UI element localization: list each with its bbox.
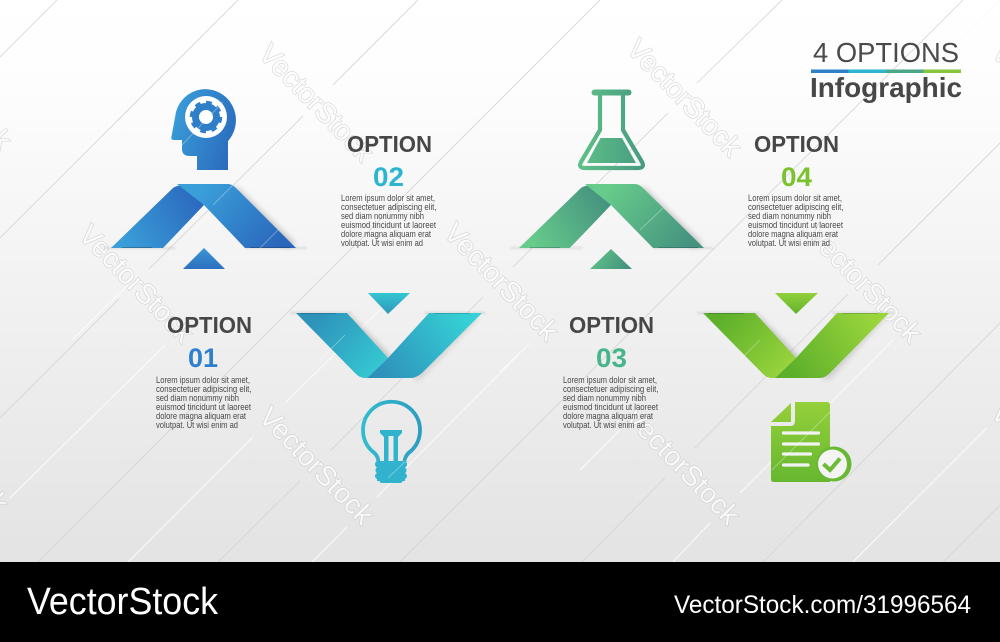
watermarks: VectorStock xyxy=(801,219,928,349)
text block: option 04: euismod tincidunt ut laoreet xyxy=(748,220,843,230)
text block: option 02: Lorem ipsum dolor sit amet, xyxy=(341,193,435,203)
text block: option 03: dolore magna aliquam erat xyxy=(563,411,653,421)
watermarks xyxy=(0,26,1000,531)
icon: flask xyxy=(580,92,643,168)
text block: option 04 xyxy=(748,193,844,248)
text block: option 04: Lorem ipsum dolor sit amet, xyxy=(748,193,842,203)
text block: option 02: dolore magna aliquam erat xyxy=(341,229,431,239)
number: 04: 04 xyxy=(781,162,812,192)
number: 02: 02 xyxy=(373,162,404,192)
panel: option 04 xyxy=(510,92,844,269)
watermarks: VectorStock xyxy=(438,217,565,347)
number: 01: 01 xyxy=(188,343,218,373)
text block: option 01: consectetuer adipiscing elit, xyxy=(156,384,252,394)
heading: option 02: OPTION xyxy=(347,131,432,157)
watermarks: VectorStock xyxy=(253,401,380,531)
watermarks: VectorStock xyxy=(253,38,380,168)
text block: option 02: euismod tincidunt ut laoreet xyxy=(341,220,436,230)
title: 4 OPTIONS xyxy=(813,37,959,68)
text block: option 03: volutpat. Ut wisi enim ad xyxy=(563,420,645,430)
title xyxy=(810,37,962,103)
triangle marker xyxy=(183,248,225,269)
text block: option 03: euismod tincidunt ut laoreet xyxy=(563,402,658,412)
footer bar xyxy=(0,562,1000,642)
text block: option 03: consectetuer adipiscing elit, xyxy=(563,384,658,394)
panel: option 03 xyxy=(563,293,894,482)
triangle marker xyxy=(775,293,818,314)
ribbon: blue up chevron xyxy=(104,184,307,249)
text block: option 01: euismod tincidunt ut laoreet xyxy=(156,402,251,412)
watermarks: VectorStock xyxy=(73,219,200,349)
ribbon: teal down chevron xyxy=(290,312,486,380)
number: 03: 03 xyxy=(596,343,627,373)
watermarks: VectorStock xyxy=(619,401,746,531)
ribbon: green down chevron xyxy=(697,312,894,380)
heading: option 03: OPTION xyxy=(569,312,654,338)
icon: document with check xyxy=(771,402,852,482)
text block: option 02 xyxy=(341,193,436,248)
text block: option 02: consectetuer adipiscing elit, xyxy=(341,202,436,212)
text block: option 04: volutpat. Ut wisi enim ad xyxy=(748,238,830,248)
icon: head with gear xyxy=(171,89,236,170)
watermarks: VectorStock xyxy=(621,33,748,163)
triangle marker xyxy=(590,249,632,269)
text block: option 02: sed diam nonummy nibh xyxy=(341,211,424,221)
text block: option 03: Lorem ipsum dolor sit amet, xyxy=(563,375,657,385)
triangle marker xyxy=(368,293,410,314)
heading: option 01: OPTION xyxy=(167,312,252,338)
title: Infographic xyxy=(810,72,962,103)
icon: light bulb xyxy=(363,402,420,483)
text block: option 01: sed diam nonummy nibh xyxy=(156,393,239,403)
panel: option 01 xyxy=(156,293,486,483)
text block: option 04: dolore magna aliquam erat xyxy=(748,229,838,239)
text block: option 01: Lorem ipsum dolor sit amet, xyxy=(156,375,250,385)
ribbon: mint up chevron xyxy=(510,184,713,249)
footer bar: VectorStock.com/31996564 xyxy=(674,591,971,619)
text block: option 02: volutpat. Ut wisi enim ad xyxy=(341,238,423,248)
text block: option 01: volutpat. Ut wisi enim ad xyxy=(156,420,238,430)
text block: option 01: dolore magna aliquam erat xyxy=(156,411,246,421)
text block: option 03 xyxy=(563,375,658,430)
panel: option 02 xyxy=(104,89,436,269)
footer bar: VectorStock xyxy=(27,581,219,623)
text block: option 04: sed diam nonummy nibh xyxy=(748,211,831,221)
text block: option 01 xyxy=(156,375,252,430)
text block: option 04: consectetuer adipiscing elit, xyxy=(748,202,844,212)
text block: option 03: sed diam nonummy nibh xyxy=(563,393,646,403)
heading: option 04: OPTION xyxy=(754,131,839,157)
